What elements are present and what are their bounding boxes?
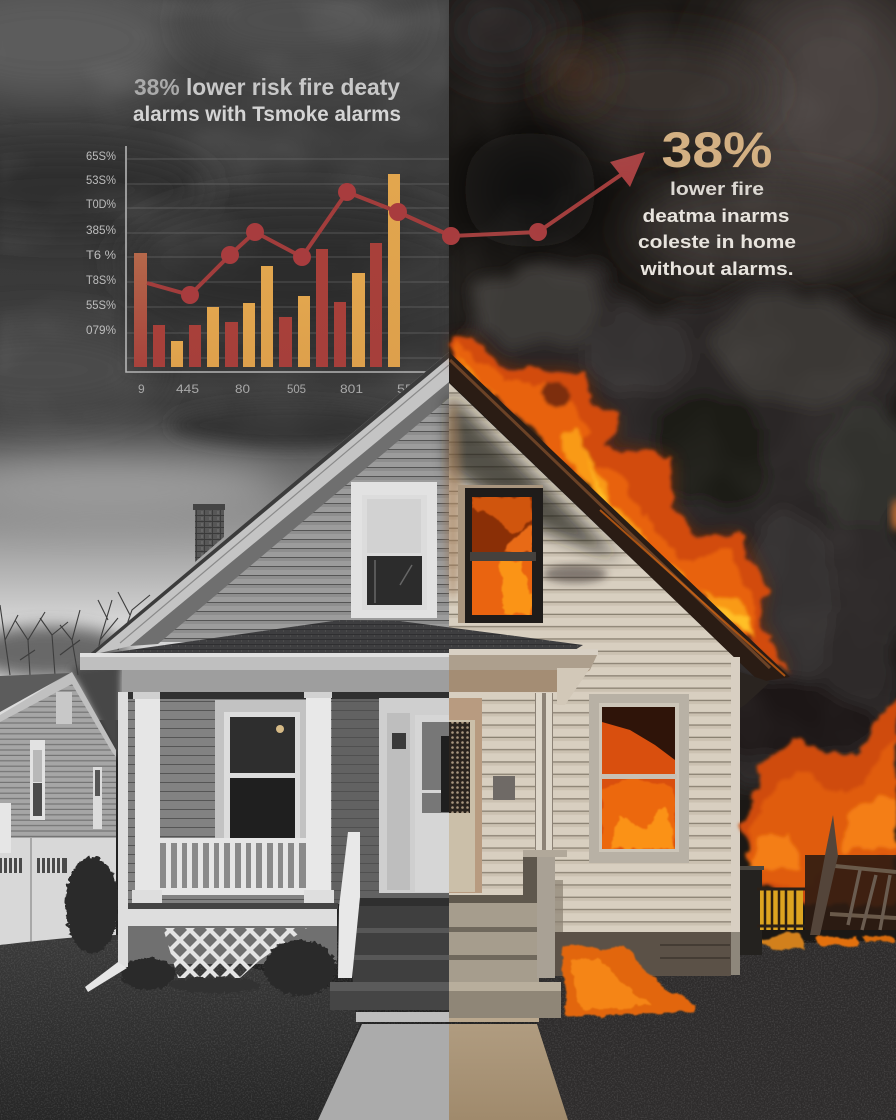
- cream siding wall: [449, 383, 737, 932]
- upper window: grayscale: [351, 482, 437, 618]
- burnt pallet: [805, 815, 896, 935]
- gable: burning half: [445, 337, 790, 975]
- arrow head: [610, 152, 645, 187]
- y axis labels: 385%: [86, 223, 116, 237]
- eave left: [80, 653, 449, 670]
- grid lines: [127, 159, 449, 358]
- roof flames halo: [453, 337, 790, 673]
- neighbour gable trim: [0, 672, 116, 757]
- dark tree behind the neighbour gable: [70, 660, 122, 760]
- stone newel post: [523, 850, 567, 978]
- caption lines: [638, 179, 796, 279]
- electric meter: [493, 776, 515, 800]
- gable: grayscale half: [87, 352, 449, 656]
- neighbour windows: [30, 740, 45, 820]
- x axis labels: 80: [235, 382, 250, 396]
- trash can: [740, 866, 764, 955]
- y axis labels: T6 %: [86, 248, 116, 262]
- corner trim and underside: [731, 657, 740, 975]
- y axis labels: T8S%: [86, 273, 116, 287]
- foundation right: [555, 932, 740, 976]
- porch shadow band: [128, 691, 449, 699]
- porch: burning half: [449, 692, 567, 1018]
- eave right: [449, 653, 598, 670]
- left stormy sky: [0, 0, 480, 720]
- x axis labels: 801: [340, 382, 363, 396]
- y axis labels: 53S%: [86, 173, 116, 187]
- ground texture: [0, 940, 896, 1120]
- siding: [158, 397, 449, 642]
- y axis labels: 65S%: [86, 149, 116, 163]
- lattice: [163, 928, 307, 978]
- neighbour roof: [0, 673, 70, 712]
- chart heading: 38% lower risk fire deaty: [134, 74, 400, 100]
- y axis labels: 55S%: [86, 298, 116, 312]
- chart panel: [86, 146, 645, 396]
- neighbour vent: [56, 692, 72, 724]
- roof flames: [453, 337, 790, 673]
- porch roof and fascia: [80, 620, 598, 705]
- porch window: [215, 700, 307, 838]
- y axis labels: 079%: [86, 323, 116, 337]
- chimney: [193, 504, 225, 562]
- column left: [132, 692, 162, 904]
- cream porch wall: [449, 692, 553, 902]
- walk slab: [356, 1012, 539, 1022]
- porch wall: [128, 692, 333, 904]
- upper window: on fire: [458, 485, 543, 623]
- slim porch post: [535, 693, 553, 851]
- chart heading: alarms with Tsmoke alarms: [133, 103, 401, 126]
- burning shrub at base: [562, 943, 698, 1017]
- chart heading: [133, 74, 401, 126]
- y axis labels: T0D%: [86, 197, 116, 211]
- caption lines: coleste in home: [638, 232, 796, 252]
- right smoke-filled sky: [440, 0, 896, 1000]
- column right: [304, 691, 334, 904]
- axes: [126, 146, 433, 372]
- door, coloured half: [449, 698, 482, 893]
- ember glow right edge: [891, 499, 896, 531]
- big percentage: 38%: [662, 122, 772, 178]
- entry door: [379, 698, 449, 893]
- y axis labels: [86, 149, 116, 337]
- x axis labels: 55: [397, 382, 413, 396]
- neighbour garage: [0, 838, 116, 945]
- caption lines: lower fire: [670, 179, 764, 199]
- trend line with arrow: [147, 152, 645, 304]
- caption lines: without alarms.: [639, 259, 794, 279]
- front walk: left half: [318, 1024, 449, 1120]
- steps: [330, 898, 449, 1010]
- distant bare trees: [0, 592, 150, 760]
- fascia shadow: [130, 380, 449, 646]
- yellow fence: [757, 888, 805, 930]
- stat callout: [638, 122, 796, 279]
- soot under eaves: [449, 395, 620, 560]
- chart backdrop: [128, 250, 449, 370]
- steps: [449, 895, 561, 1018]
- smoke texture: [449, 0, 896, 800]
- porch: grayscale half: [85, 691, 449, 1010]
- railing: [160, 838, 307, 895]
- bars: [134, 174, 400, 367]
- porch floor: [124, 903, 338, 926]
- ground flames: [757, 932, 896, 950]
- shingled roof: [87, 620, 583, 660]
- x axis labels: 505: [287, 382, 306, 396]
- frieze left: [122, 670, 449, 692]
- white fascia: [87, 352, 449, 656]
- downspout: [85, 692, 128, 992]
- caption lines: deatma inarms: [642, 206, 790, 226]
- neighbouring house: [0, 672, 116, 960]
- frieze right: [449, 670, 590, 692]
- x axis labels: 9: [138, 382, 145, 396]
- x axis labels: 445: [176, 382, 199, 396]
- smoke plume: [462, 265, 896, 780]
- shrubs: [121, 940, 336, 996]
- hedge by garage: [65, 857, 119, 953]
- stair handrail: [338, 832, 360, 978]
- ground: left lawn: [0, 935, 362, 1120]
- neighbour wall: [0, 673, 116, 860]
- yard fire behind: [741, 697, 896, 905]
- ground: right yard: [449, 940, 896, 1120]
- burning wall beside post: [553, 880, 563, 932]
- lower right window: on fire: [589, 694, 689, 863]
- foundation: [125, 926, 337, 964]
- charred rake board: [450, 353, 790, 682]
- front walk: right half: [449, 1024, 568, 1120]
- x axis labels: [138, 382, 413, 396]
